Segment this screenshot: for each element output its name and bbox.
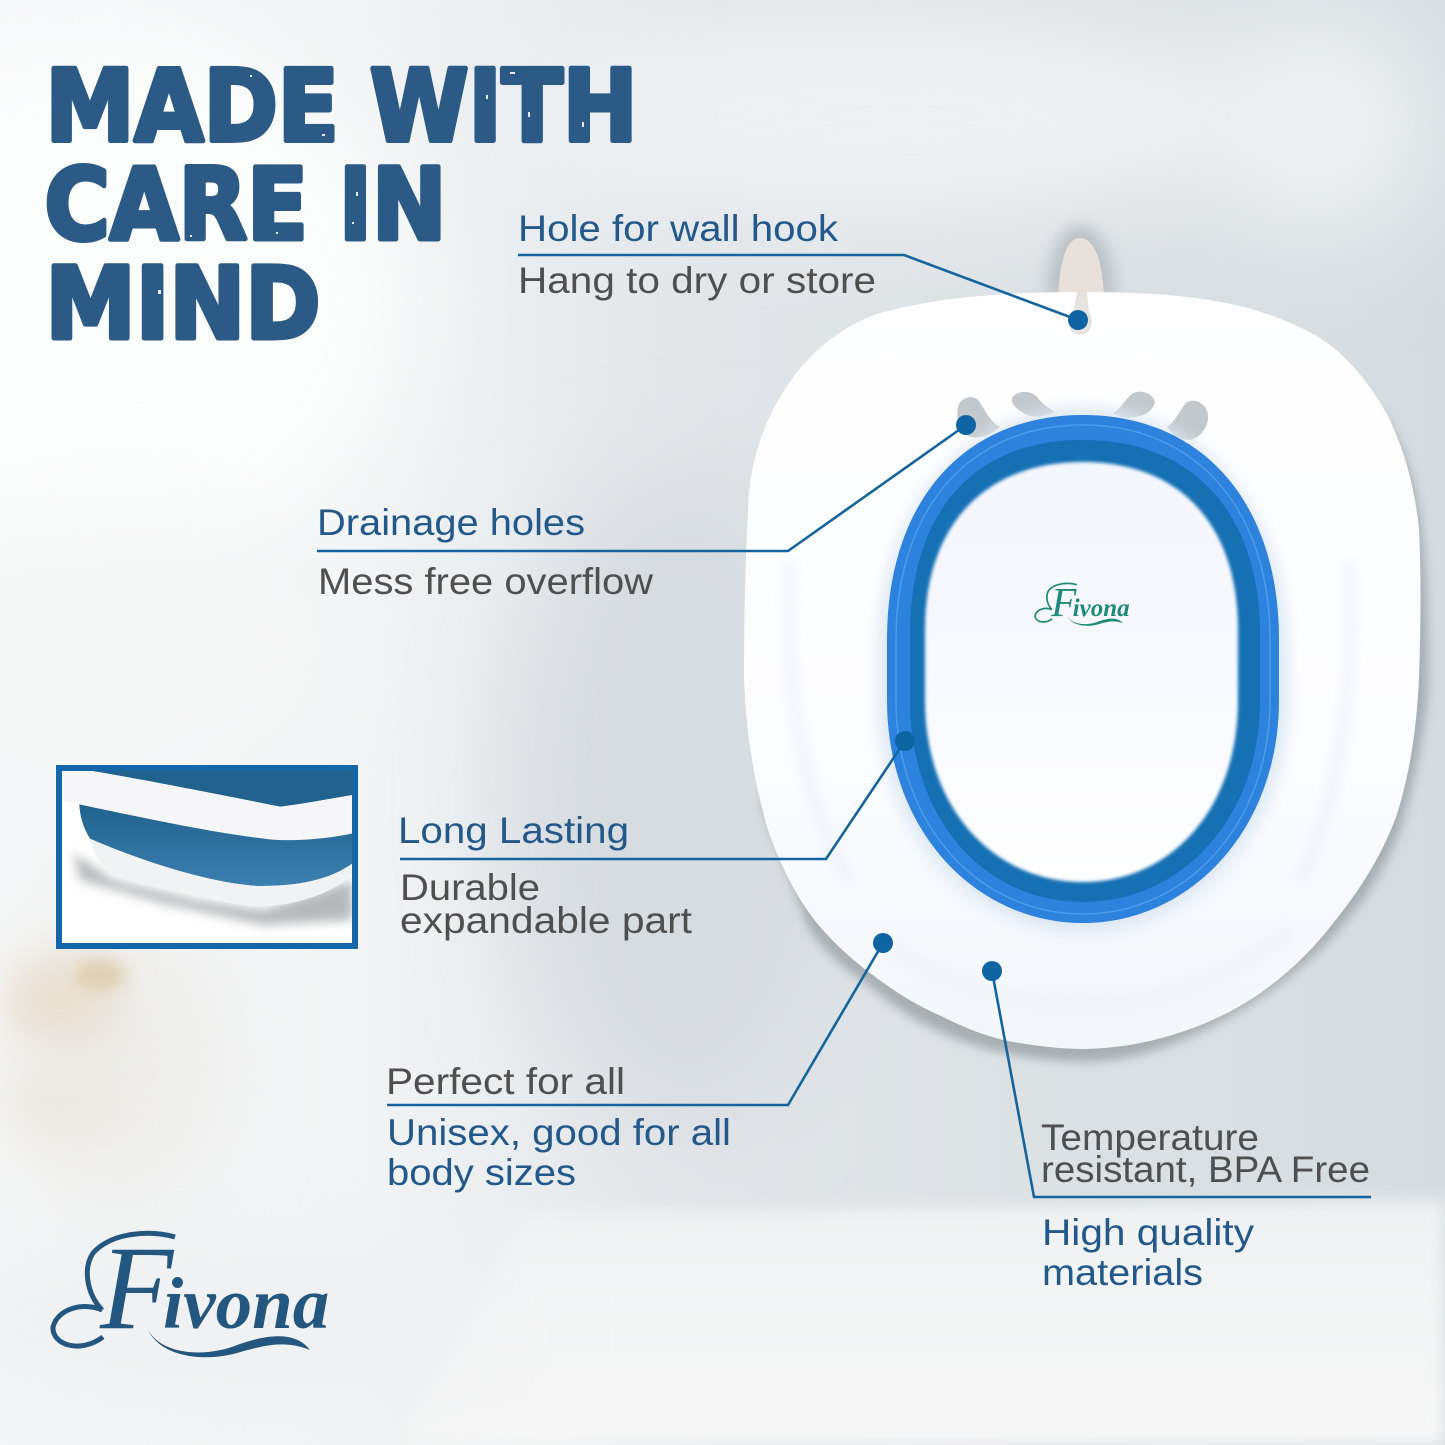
logo: Fivona: F	[99, 1221, 175, 1354]
callout: perfect for all: body sizes	[387, 1151, 576, 1193]
callout: hole for wall hook: Hang to dry or store	[518, 259, 876, 301]
drainage holes	[957, 392, 1208, 440]
title: MADE WITH	[46, 50, 638, 164]
callout: hole for wall hook: Hole for wall hook	[518, 207, 838, 249]
callout: long lasting	[398, 731, 915, 941]
logo: Fivona: ivona	[163, 1263, 329, 1344]
title	[44, 50, 638, 362]
callout: hole for wall hook	[518, 207, 1088, 330]
small Fivona logo	[1035, 579, 1130, 626]
callout: temperature resistant: resistant, BPA Free	[1041, 1148, 1370, 1190]
tray shadow	[760, 300, 1428, 1062]
callout: drainage holes	[317, 415, 976, 602]
ring glow	[880, 408, 1286, 932]
inset: expandable part close-up	[59, 768, 355, 946]
callout: drainage holes: Mess free overflow	[318, 560, 654, 602]
callout: temperature resistant: High quality	[1042, 1211, 1254, 1253]
title: CARE IN	[44, 148, 446, 263]
callout: temperature resistant	[982, 961, 1371, 1293]
blue silicone ring	[887, 415, 1279, 923]
callout: temperature resistant: Temperature	[1041, 1116, 1259, 1158]
hook strap	[1070, 292, 1092, 335]
inner basin	[925, 462, 1238, 882]
callout: long lasting: Long Lasting	[398, 809, 629, 851]
title: MIND	[46, 247, 320, 362]
logo: Fivona	[53, 1221, 329, 1357]
icon: wall hook	[1046, 226, 1116, 300]
tray embossing	[789, 560, 1351, 1005]
callout: temperature resistant: materials	[1042, 1251, 1203, 1293]
callout: long lasting: Durable	[400, 866, 540, 908]
callout: long lasting: expandable part	[400, 899, 693, 941]
small Fivona logo: ivona	[1073, 595, 1130, 622]
callout: perfect for all: Perfect for all	[386, 1060, 625, 1102]
product: folding sitz bath	[744, 226, 1428, 1062]
small Fivona logo: F	[1050, 579, 1077, 625]
callout: perfect for all	[386, 933, 893, 1193]
tray body	[744, 292, 1420, 1049]
callout: perfect for all: Unisex, good for all	[387, 1111, 731, 1153]
callout: drainage holes: Drainage holes	[317, 501, 585, 543]
